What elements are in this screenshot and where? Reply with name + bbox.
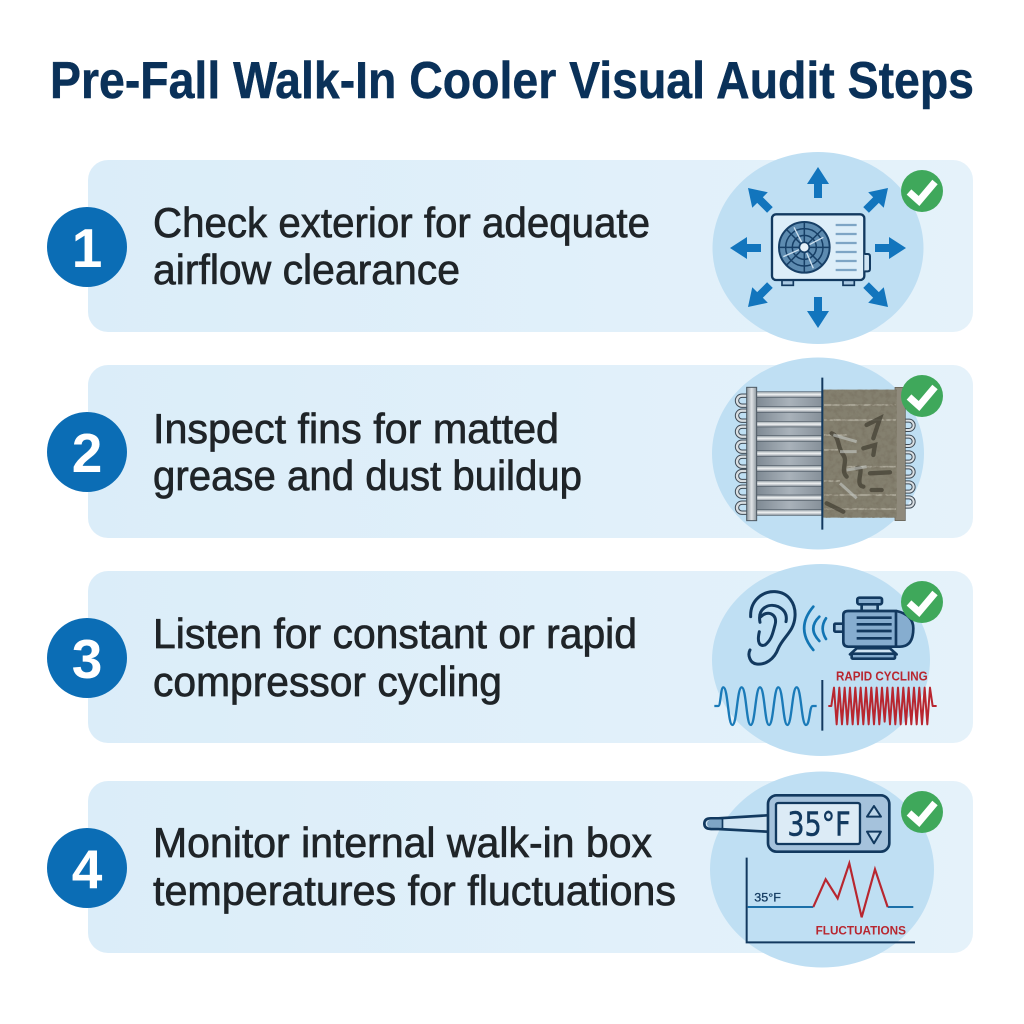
step 3 number badge: 3 <box>72 628 102 690</box>
thermometer buttons <box>867 806 881 843</box>
step 3 number badge <box>47 618 127 698</box>
icon: clean versus dirty coil <box>712 358 924 550</box>
step 1 text: airflow clearance <box>153 246 460 293</box>
step 4 text: Monitor internal walk-in box <box>153 819 652 866</box>
chart axes <box>747 858 915 942</box>
step 3 text: Listen for constant or rapid <box>153 610 637 657</box>
normal waveform <box>714 687 817 725</box>
panel: step 1 <box>47 152 973 344</box>
thermometer probe <box>704 815 768 832</box>
step 2 text: Inspect fins for matted <box>153 405 559 452</box>
sound waves <box>804 607 826 650</box>
step 1 text: Check exterior for adequate <box>153 199 650 246</box>
rapid cycling label: RAPID CYCLING <box>836 668 928 683</box>
temperature reading: 35°F <box>787 806 851 844</box>
step 2 number badge: 2 <box>72 422 102 484</box>
check badge 4 <box>901 791 943 833</box>
step 1 text <box>153 199 650 293</box>
rapid waveform <box>828 688 937 724</box>
step 3 text: compressor cycling <box>153 658 502 705</box>
icon: ear, motor and waveforms <box>712 564 937 756</box>
step 2 text <box>153 405 582 499</box>
step 2 text: grease and dust buildup <box>153 452 582 499</box>
step 4 text <box>153 819 676 914</box>
step 4 number badge <box>47 828 127 908</box>
thermometer body <box>768 795 889 852</box>
panel: step 4 <box>47 772 973 968</box>
step 3 text <box>153 610 637 705</box>
chart label 35F: 35°F <box>754 891 781 905</box>
panel: step 3 <box>47 564 973 756</box>
temperature line <box>748 904 913 910</box>
check badge 2 <box>901 375 943 417</box>
step 2 number badge <box>47 412 127 492</box>
step 1 number badge <box>47 207 127 287</box>
fluctuations label: FLUCTUATIONS <box>816 923 906 937</box>
check badge 1 <box>901 170 943 212</box>
dirty half of coil <box>823 387 914 521</box>
step 4 number badge: 4 <box>72 838 103 900</box>
panel: step 2 <box>47 358 973 550</box>
clean half of coil <box>737 387 822 521</box>
check badge 3 <box>901 581 943 623</box>
step 4 text: temperatures for fluctuations <box>153 867 676 914</box>
ear <box>749 592 795 664</box>
motor <box>834 598 913 659</box>
step 1 number badge: 1 <box>72 217 102 279</box>
icon: condenser unit with airflow arrows <box>712 152 924 344</box>
icon: thermometer and temperature chart <box>704 772 934 968</box>
